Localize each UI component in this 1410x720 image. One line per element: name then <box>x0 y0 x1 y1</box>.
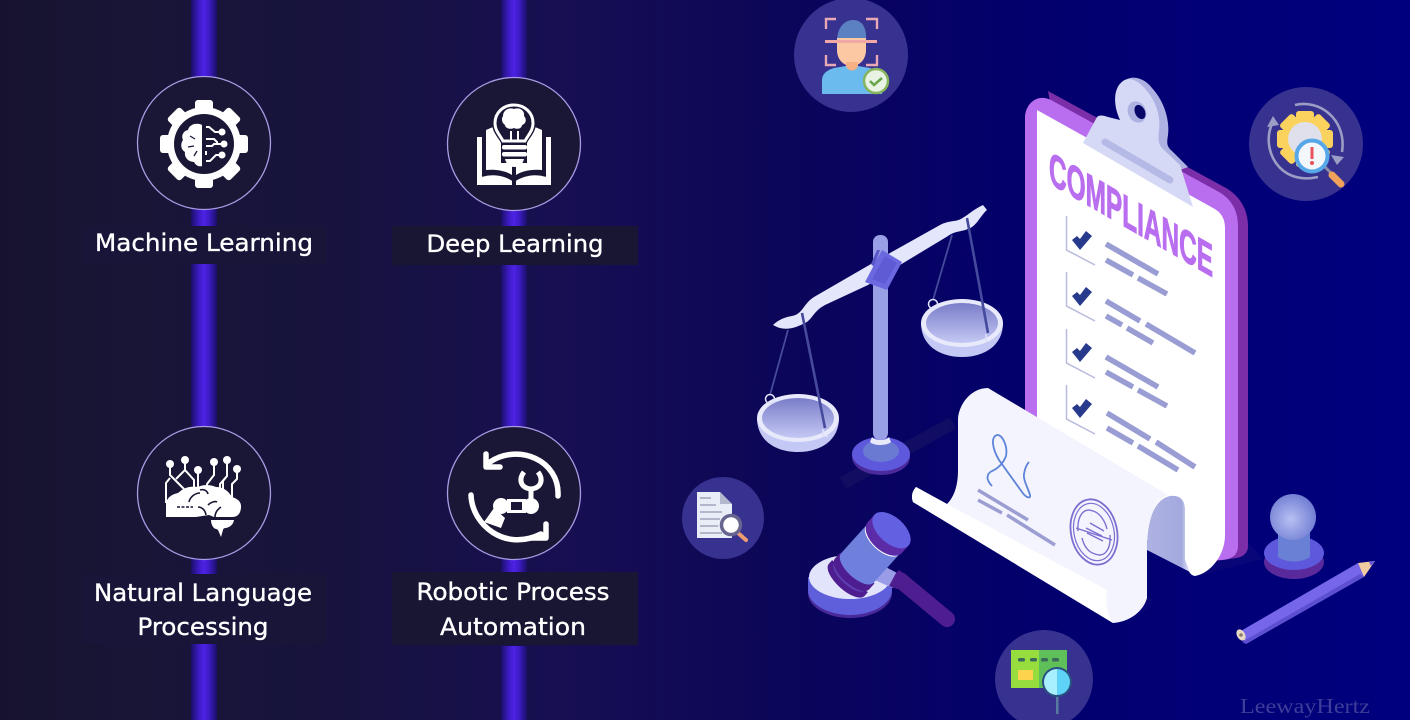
seal stamp <box>1065 495 1123 569</box>
label: natural language processing: Processing <box>138 613 268 641</box>
signature <box>988 435 1030 497</box>
illustration: gavel <box>808 504 947 619</box>
label: natural language processing <box>94 579 312 641</box>
watermark: LeewayHertz <box>1240 694 1370 718</box>
badge: document search <box>682 477 764 559</box>
paper sheet <box>1037 110 1225 576</box>
heading: COMPLIANCE: COMPLIANCE <box>1049 141 1213 287</box>
handle <box>900 580 947 619</box>
illustration: pencil <box>1235 561 1375 644</box>
checklist <box>1066 216 1195 470</box>
gavel head <box>822 504 918 603</box>
icon: machine learning gear brain <box>138 76 270 210</box>
illustration: clipboard <box>1025 78 1248 576</box>
illustration: balance scale <box>757 205 1003 475</box>
icon: book and light bulb <box>448 78 580 210</box>
label: machine learning: Machine Learning <box>95 229 313 257</box>
label: robotic process automation <box>416 578 610 641</box>
deep learning item <box>392 78 638 265</box>
illustration: rubber stamp <box>1264 494 1324 579</box>
badge: face recognition <box>794 0 908 112</box>
label: deep learning: Deep Learning <box>426 230 604 258</box>
icon: robot arm with cycle arrows <box>448 426 580 560</box>
machine learning item <box>82 76 326 264</box>
label: robotic process automation: Automation <box>440 613 586 641</box>
illustration: signed scroll <box>912 388 1190 623</box>
vertical connector bars <box>191 0 527 720</box>
badge: data magnifier <box>995 630 1093 720</box>
robotic process automation item <box>392 426 638 645</box>
natural language processing item <box>82 426 326 644</box>
icon: brain with circuit nodes <box>138 426 270 560</box>
clip <box>1083 78 1193 207</box>
label: robotic process automation: Robotic Process <box>416 578 610 606</box>
label: natural language processing: Natural Language <box>94 579 312 607</box>
badge: gear audit <box>1249 87 1363 201</box>
floor shadows <box>843 423 1263 622</box>
